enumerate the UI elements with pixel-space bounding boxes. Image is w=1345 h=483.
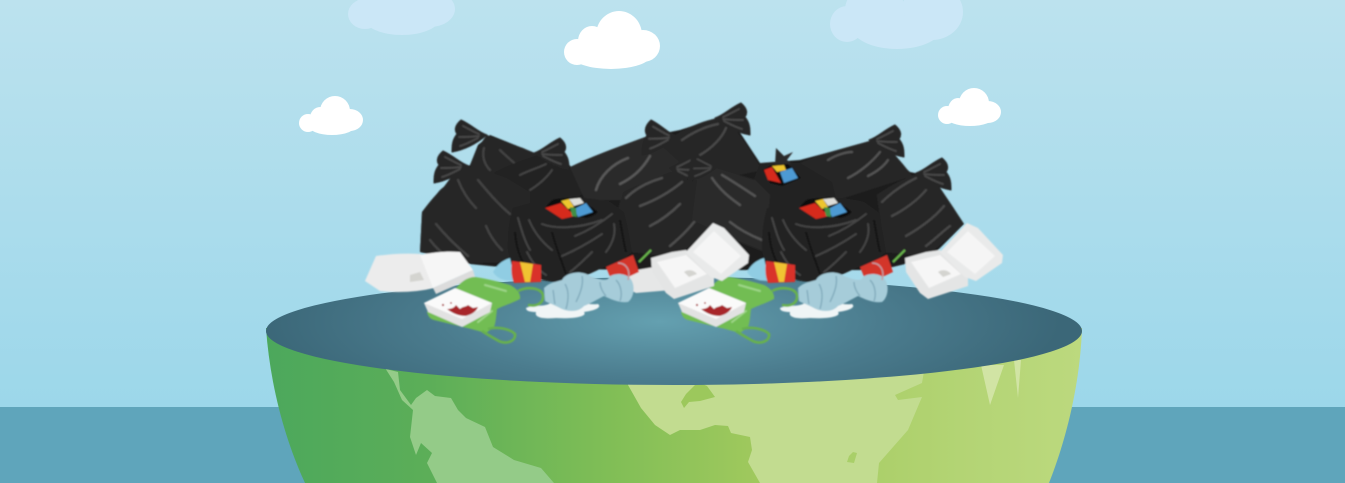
foam box: open right xyxy=(905,223,1003,299)
bag: back center xyxy=(570,120,688,200)
bag: front right with contents xyxy=(762,197,886,282)
foam box: open middle xyxy=(651,223,749,299)
bag: middle xyxy=(618,153,720,257)
lake cut-out xyxy=(681,382,715,408)
cloud: pale top left xyxy=(348,0,455,35)
sea band xyxy=(0,407,1345,483)
foam box: closed left xyxy=(365,252,475,294)
globe lower half xyxy=(266,328,1082,483)
bag: back second left xyxy=(493,138,590,210)
bag: small with spilled contents xyxy=(750,148,840,230)
foam strip: under middle pile xyxy=(622,266,672,293)
cloud: white right xyxy=(938,88,1001,126)
garbage pile xyxy=(365,103,1003,342)
cloud: white center xyxy=(564,11,660,69)
green bag handles behind boxes xyxy=(639,250,905,262)
cloud: white left xyxy=(299,96,363,135)
pile silhouette underlay xyxy=(420,118,964,270)
bag: far right xyxy=(877,158,964,256)
island: Madagascar xyxy=(847,452,857,463)
litter: right group xyxy=(678,255,893,342)
continent: the Americas xyxy=(380,360,554,483)
litter: left group xyxy=(424,255,639,342)
continent: Africa and Europe xyxy=(628,360,926,483)
bag: back left xyxy=(452,120,575,210)
bag: back center right xyxy=(660,103,762,185)
bag: back right xyxy=(800,125,912,200)
bag: middle right xyxy=(688,154,770,252)
bag: front left with contents xyxy=(508,197,632,282)
cloud: pale top right xyxy=(830,0,963,49)
bag: far left xyxy=(420,151,532,263)
cut surface of the globe xyxy=(266,277,1082,385)
continent fragments right xyxy=(981,360,1021,405)
